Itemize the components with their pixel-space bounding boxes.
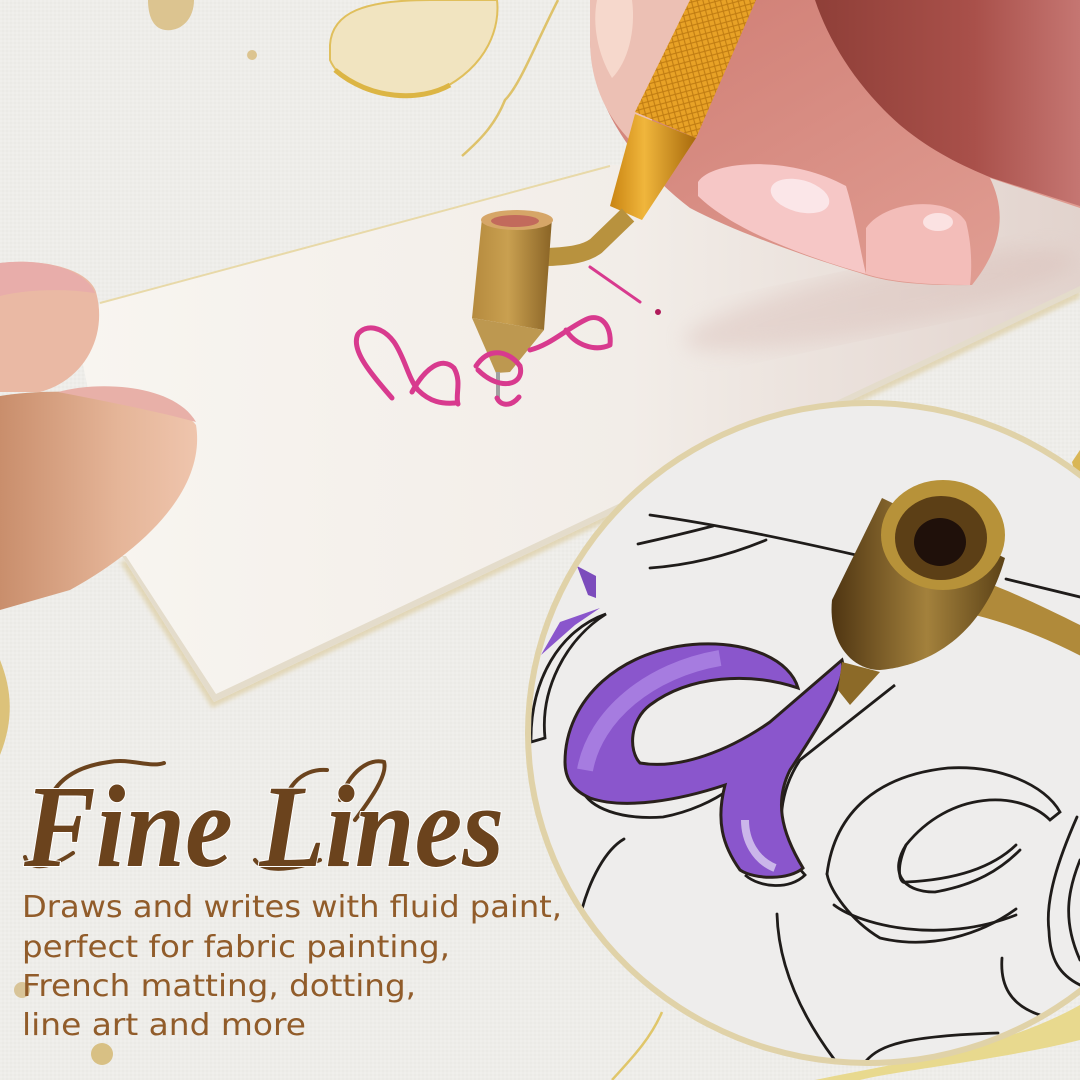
hand right with pen — [590, 0, 1080, 285]
letter shadow outline — [582, 685, 895, 886]
description text — [22, 890, 562, 1043]
fingernail large — [698, 164, 866, 274]
handwritten pink word — [356, 267, 660, 404]
top finger — [0, 262, 99, 392]
fingernail second — [866, 204, 971, 285]
purple fragments — [541, 608, 600, 655]
description text: French matting, dotting, — [22, 969, 416, 1004]
description text: perfect for fabric painting, — [22, 930, 450, 965]
paper card — [80, 165, 1080, 708]
fingers left — [0, 262, 197, 610]
description text: line art and more — [22, 1008, 306, 1043]
circular detail inset — [520, 395, 1080, 1075]
lower finger — [0, 392, 197, 610]
description text: Draws and writes with fluid paint, — [22, 890, 562, 925]
pen handle — [472, 0, 756, 399]
index finger — [590, 0, 700, 150]
brass nib — [978, 586, 1080, 656]
dark shaded fingers — [815, 0, 1080, 206]
second letter a — [827, 768, 1060, 882]
ink lines — [531, 515, 1080, 1061]
title: Fine Lines — [23, 761, 504, 892]
title swashes — [25, 761, 385, 869]
purple letter — [565, 644, 843, 877]
